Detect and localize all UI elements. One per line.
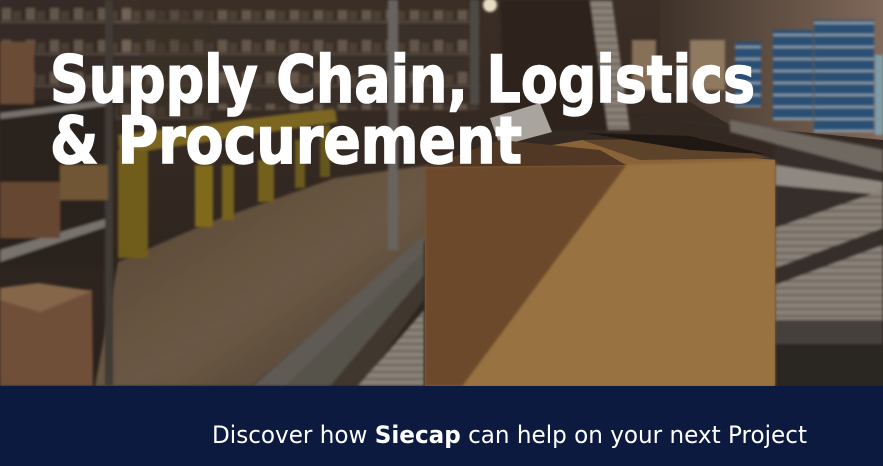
title line 2: & Procurement	[50, 104, 522, 179]
footer call to action: Discover how Siecap can help on your next Project	[212, 421, 807, 449]
title line 1: Supply Chain, Logistics	[50, 43, 755, 118]
photo: right conveyors	[625, 115, 883, 386]
photo: left shelving	[0, 0, 210, 386]
photo: central conveyor tower	[483, 0, 656, 130]
photo: warehouse floor	[95, 165, 430, 386]
photo: right warehouse wall	[660, 0, 883, 140]
photo: floor conveyor	[252, 235, 424, 386]
photo: yellow rack posts	[118, 108, 337, 258]
title	[50, 43, 755, 179]
photo: far shelving	[210, 0, 480, 250]
photo: large cardboard box	[425, 103, 775, 386]
footer band	[0, 386, 883, 466]
photo: blue bins	[690, 20, 883, 135]
photo: bottom-left carton	[0, 283, 93, 386]
